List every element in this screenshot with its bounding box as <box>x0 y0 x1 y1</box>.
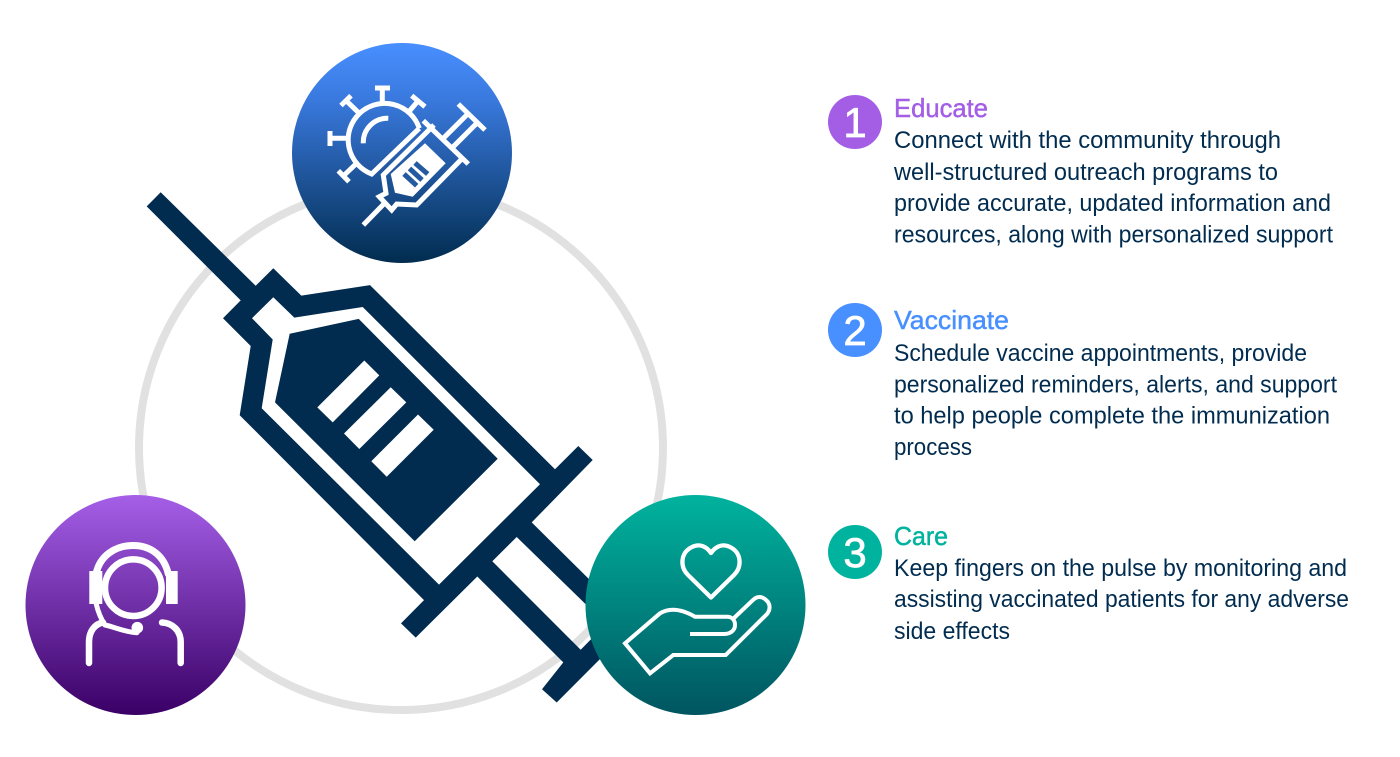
circle: hand and heart icon <box>586 495 806 715</box>
step 3: Care <box>828 521 1349 645</box>
text block: Care description: Keep fingers on the pulse by monitoring and <box>894 555 1347 582</box>
text block: Care description <box>894 555 1349 645</box>
badge: number 1 <box>828 95 882 149</box>
text block: Vaccinate description <box>894 340 1337 461</box>
heading: Care: Care <box>894 521 948 551</box>
step 2: Vaccinate <box>828 303 1337 461</box>
step 1: Educate <box>828 93 1333 248</box>
text block: Vaccinate description: Schedule vaccine appointments, provide <box>894 340 1307 367</box>
icon: heart <box>682 545 740 598</box>
text block: Vaccinate description: process <box>894 434 972 461</box>
heading: Vaccinate: Vaccinate <box>894 305 1009 335</box>
grey ring <box>139 186 663 710</box>
badge: number 2 <box>828 303 882 357</box>
text block: Educate description: provide accurate, updated information and <box>894 190 1331 217</box>
text block: Educate description: Connect with the community through <box>894 127 1281 154</box>
heading: Educate: Educate <box>894 93 988 123</box>
text block: Educate description: resources, along with personalized support <box>894 222 1333 248</box>
text block: Care description: side effects <box>894 618 1010 645</box>
icon: agent with headset <box>89 546 181 663</box>
text block: Educate description <box>893 127 1333 248</box>
circle: virus and syringe icon <box>292 43 512 263</box>
text block: Vaccinate description: personalized reminders, alerts, and support <box>894 372 1337 398</box>
text block: Care description: assisting vaccinated patients for any adverse <box>894 586 1349 613</box>
icon: virus <box>330 88 425 182</box>
text block: Educate description: well-structured outreach programs to <box>893 159 1278 186</box>
circle: agent with headset icon <box>26 495 246 715</box>
icon: open hand <box>625 597 770 673</box>
text block: Vaccinate description: to help people complete the immunization <box>894 402 1330 430</box>
badge: number 2: 2 <box>843 307 867 354</box>
large syringe <box>147 192 610 702</box>
badge: number 3: 3 <box>843 529 867 576</box>
badge: number 1: 1 <box>843 99 867 146</box>
icon: small syringe <box>363 104 485 225</box>
badge: number 3 <box>828 525 882 579</box>
